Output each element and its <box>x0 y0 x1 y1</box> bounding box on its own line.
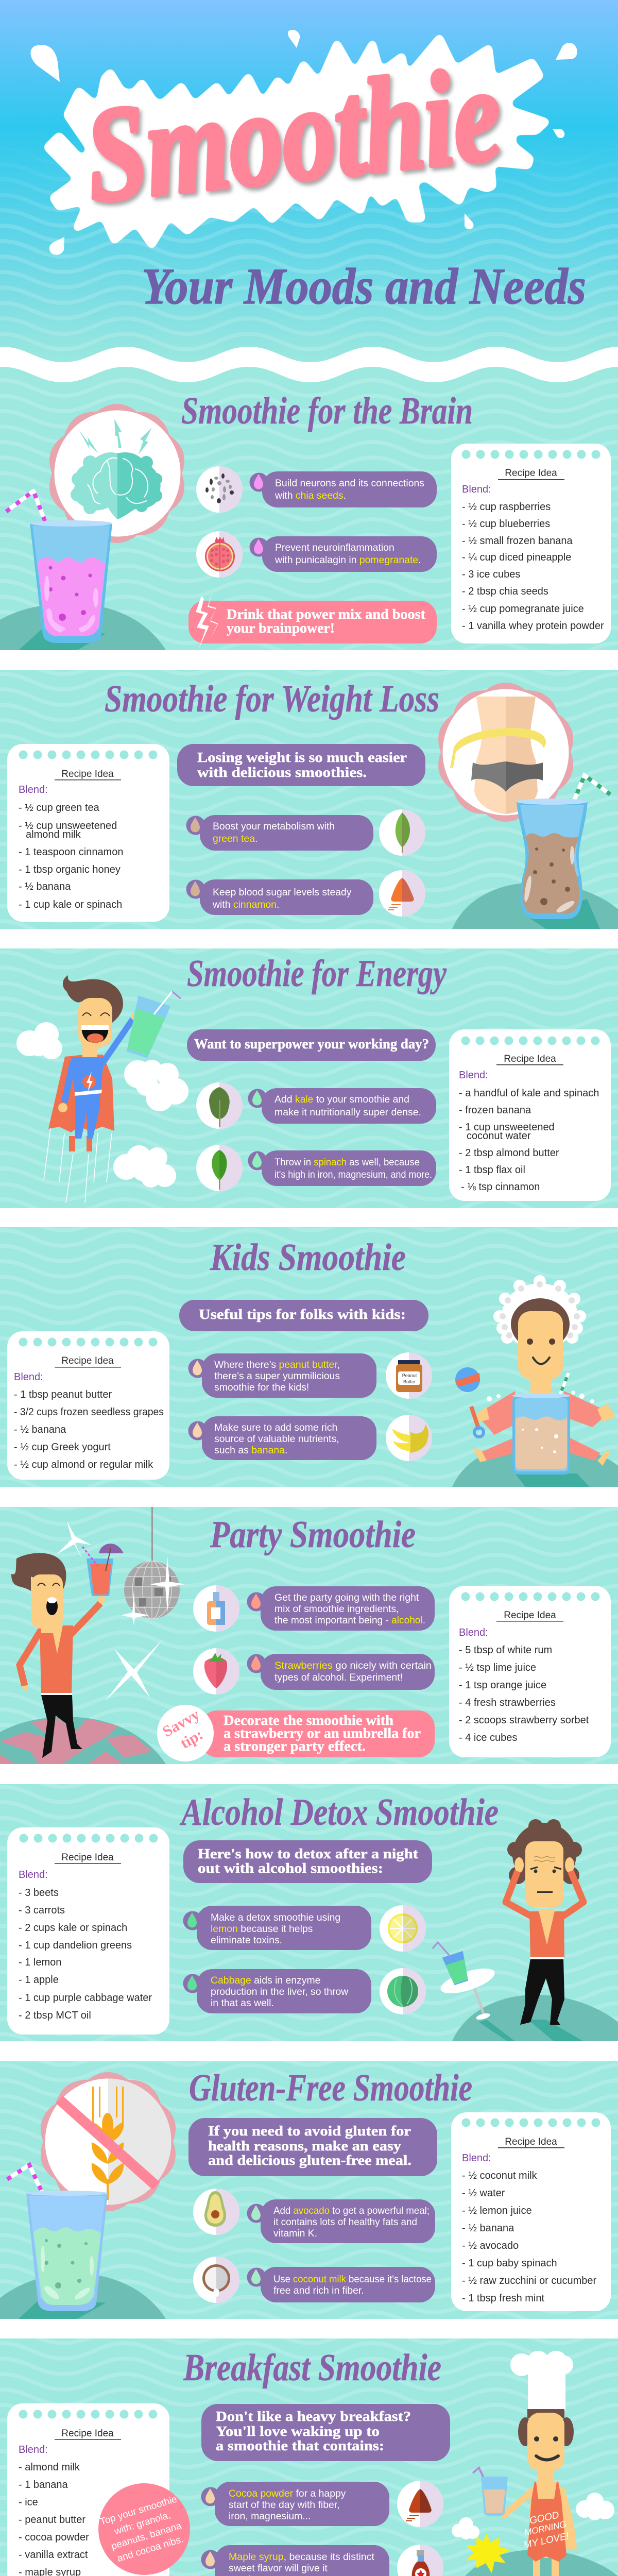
card: recipe idea <box>449 1586 611 1757</box>
card: recipe idea: Blend: <box>459 1070 488 1081</box>
tip: lemon: Make a detox smoothie using <box>211 1912 340 1923</box>
tip: coconut: free and rich in fiber. <box>273 2285 364 2296</box>
icon: hungover man <box>506 1819 583 2025</box>
tip: cocoa: iron, magnesium... <box>229 2511 311 2522</box>
icon: maple syrup <box>397 2545 443 2576</box>
icon: pomegranate <box>196 531 243 578</box>
icon: brown smoothie glass <box>517 775 610 919</box>
callout: drink that power mix: Drink that power mix and boost <box>227 606 425 622</box>
card: recipe idea: - 5 tbsp of white rum <box>459 1645 552 1656</box>
card: recipe idea: Recipe Idea <box>61 769 114 779</box>
icon: disco ball <box>124 1507 180 1619</box>
icon: baby <box>455 1275 615 1466</box>
card: recipe idea: Blend: <box>459 1627 488 1638</box>
card: recipe idea: - ½ lemon juice <box>462 2205 532 2216</box>
card: recipe idea: - vanilla extract <box>19 2549 88 2561</box>
panel: smoothie for weight loss <box>0 670 618 929</box>
card: recipe idea: Blend: <box>19 2444 48 2455</box>
card: recipe idea: Recipe Idea <box>61 1852 114 1863</box>
tip: kale <box>248 1088 436 1124</box>
icon: chef <box>502 2351 574 2576</box>
card: recipe idea: - 1 apple <box>19 1974 59 1986</box>
card: recipe idea: - ½ water <box>462 2188 505 2199</box>
tip: alcohol: mix of smoothie ingredients, <box>274 1603 399 1615</box>
card: recipe idea: Blend: <box>19 1869 48 1880</box>
tip: cabbage: Cabbage aids in enzyme <box>211 1975 320 1986</box>
heading: Gluten-Free Smoothie <box>189 2067 472 2109</box>
tip: peanut butter: there's a super yummilicious <box>214 1370 340 1382</box>
icon: peanut butter jar: Butter <box>403 1379 416 1384</box>
icon: hill <box>452 1995 618 2041</box>
callout: intro <box>187 1029 436 1061</box>
callout: savvy tip: Decorate the smoothie with <box>224 1713 393 1728</box>
card: recipe idea: - ½ coconut milk <box>462 2170 538 2181</box>
panel: alcohol detox smoothie <box>0 1784 618 2041</box>
icon: kale <box>196 1082 243 1129</box>
panel: header <box>0 0 618 366</box>
card: recipe idea: - 1 cup purple cabbage water <box>19 1992 152 2004</box>
callout: intro <box>179 1300 428 1331</box>
tip: cabbage <box>183 1969 371 2013</box>
card: recipe idea: Recipe Idea <box>505 468 557 479</box>
icon: milk splash <box>47 38 546 245</box>
icon: chef: GOOD <box>528 2510 560 2527</box>
icon: brain badge <box>49 404 184 543</box>
card: recipe idea: - 1 teaspoon cinnamon <box>19 846 123 858</box>
icon: lemon <box>380 1905 426 1952</box>
card: recipe idea: - ½ banana <box>14 1424 66 1435</box>
card: recipe idea: - ½ cup almond or regular milk <box>14 1459 153 1470</box>
callout: intro: a smoothie that contains: <box>216 2438 384 2453</box>
icon: sparkles <box>57 1521 185 1701</box>
tip: banana <box>188 1416 376 1460</box>
tip: chia seeds: Build neurons and its connections <box>275 478 424 489</box>
card: recipe idea: - 3 carrots <box>19 1905 65 1916</box>
card: recipe idea: - ½ cup blueberries <box>462 518 550 530</box>
callout: topping tip: with: granola, <box>113 2510 172 2537</box>
tip: strawberry: Strawberries go nicely with certain <box>274 1660 432 1671</box>
tip: cinnamon: Keep blood sugar levels steady <box>213 887 352 898</box>
callout: intro: Losing weight is so much easier <box>197 750 407 765</box>
tip: cabbage: production in the liver, so throw <box>211 1986 349 1997</box>
tip: lemon: eliminate toxins. <box>211 1935 282 1946</box>
panel: smoothie for the brain <box>0 367 618 650</box>
card: recipe idea: - ½ banana <box>19 881 71 892</box>
card: recipe idea: Blend: <box>462 2153 491 2164</box>
tip: cocoa <box>201 2482 389 2526</box>
tip: alcohol <box>247 1586 435 1631</box>
tip: avocado <box>247 2199 435 2243</box>
card: recipe idea: - ½ cup raspberries <box>462 501 551 513</box>
panel: breakfast smoothie <box>0 2338 618 2576</box>
card: recipe idea: - 2 tbsp MCT oil <box>19 2010 91 2021</box>
tip: lemon: lemon because it helps <box>211 1923 313 1935</box>
heading: Alcohol Detox Smoothie <box>180 1791 499 1834</box>
icon: spinach <box>196 1145 243 1191</box>
tip: cocoa: Cocoa powder for a happy <box>229 2488 346 2499</box>
icon: dance floor <box>0 1717 166 1764</box>
callout: savvy tip: a strawberry or an umbrella for <box>224 1725 421 1741</box>
card: recipe idea: - cocoa powder <box>19 2532 89 2543</box>
tip: alcohol: the most important being - alcohol. <box>274 1615 425 1626</box>
callout: intro: health reasons, make an easy <box>208 2138 402 2154</box>
card: recipe idea: - 1 lemon <box>19 1957 61 1968</box>
icon: party man <box>11 1544 124 1758</box>
heading: Breakfast Smoothie <box>183 2347 441 2389</box>
card: recipe idea: coconut water <box>467 1130 531 1142</box>
card: recipe idea: - ⅛ tsp cinnamon <box>461 1181 540 1193</box>
card: recipe idea: - ½ cup unsweetened <box>19 820 117 832</box>
heading: Party Smoothie <box>210 1514 416 1556</box>
callout: savvy tip <box>157 1705 435 1761</box>
icon: kids smoothie glass <box>512 1373 570 1475</box>
tip: pomegranate: Prevent neuroinflammation <box>275 542 394 553</box>
icon: hill <box>0 604 166 650</box>
card: recipe idea: - 1 tbsp flax oil <box>459 1164 525 1176</box>
icon: chef: MORNING <box>524 2519 567 2537</box>
card: recipe idea: - ½ cup green tea <box>19 802 100 814</box>
icon: avocado <box>193 2189 239 2235</box>
callout: intro: You'll love waking up to <box>216 2424 380 2439</box>
callout: savvy tip: tip: <box>178 1726 206 1752</box>
callout: drink that power mix <box>188 592 437 649</box>
callout: intro: Useful tips for folks with kids: <box>199 1307 406 1322</box>
heading: Smoothie for Weight Loss <box>105 678 439 720</box>
tip: coconut <box>247 2267 435 2302</box>
tip: coconut: Use coconut milk because it's lactose <box>273 2274 432 2285</box>
icon: hill <box>0 2273 166 2319</box>
tip: kale: Add kale to your smoothie and <box>274 1094 409 1105</box>
tip: avocado: Add avocado to get a powerful meal; <box>273 2205 430 2216</box>
card: recipe idea: - ½ small frozen banana <box>462 535 573 547</box>
icon: glass on table <box>433 1942 497 2021</box>
card: recipe idea: - 1 vanilla whey protein powder <box>462 620 604 632</box>
card: recipe idea: - ½ banana <box>462 2223 514 2234</box>
icon: clouds <box>16 1022 188 1188</box>
icon: hill <box>452 1443 618 1487</box>
card: recipe idea <box>7 1331 169 1480</box>
card: recipe idea: - ½ raw zucchini or cucumber <box>462 2275 597 2286</box>
card: recipe idea: - frozen banana <box>459 1105 531 1116</box>
icon: green smoothie glass <box>7 2165 108 2311</box>
subtitle: Your Moods and Needs <box>142 258 586 315</box>
icon: pink smoothie glass <box>6 491 112 643</box>
callout: intro: and delicious gluten-free meal. <box>208 2153 411 2168</box>
tip: strawberry <box>247 1654 435 1690</box>
tip: green tea: Boost your metabolism with <box>213 821 335 832</box>
card: recipe idea: - 4 ice cubes <box>459 1732 517 1743</box>
callout: intro <box>177 744 425 786</box>
card: recipe idea: - 1 banana <box>19 2479 68 2490</box>
tip: avocado: vitamin K. <box>273 2228 317 2239</box>
icon: hill <box>452 2550 618 2576</box>
card: recipe idea: - 1 cup kale or spinach <box>19 899 122 910</box>
panel: party smoothie <box>0 1507 618 1764</box>
card: recipe idea <box>7 2403 169 2576</box>
callout: intro: Want to superpower your working day? <box>194 1036 429 1052</box>
card: recipe idea <box>7 744 169 922</box>
heading: Smoothie for the Brain <box>181 390 473 432</box>
callout: drink that power mix: your brainpower! <box>227 620 335 636</box>
card: recipe idea <box>449 1029 611 1201</box>
tip: peanut butter: smoothie for the kids! <box>214 1382 309 1393</box>
tip: banana: Make sure to add some rich <box>214 1422 337 1433</box>
card: recipe idea: - 3 ice cubes <box>462 569 520 580</box>
panel: gluten-free smoothie <box>0 2061 618 2319</box>
wave divider <box>0 347 618 392</box>
card: recipe idea: - 1 cup dandelion greens <box>19 1940 132 1951</box>
callout: topping tip <box>98 2483 190 2575</box>
tip: spinach: it's high in iron, magnesium, and more. <box>274 1169 432 1180</box>
card: recipe idea: - 3/2 cups frozen seedless grapes <box>14 1406 164 1418</box>
card: recipe idea: - ice <box>19 2497 38 2508</box>
tip: strawberry: types of alcohol. Experiment! <box>274 1672 403 1683</box>
heading: Kids Smoothie <box>210 1236 406 1279</box>
icon: chia seeds <box>196 466 243 513</box>
icon: chef: MY LOVE! <box>523 2531 570 2551</box>
tip: kale: make it nutritionally super dense. <box>274 1107 421 1118</box>
icon: no gluten badge <box>41 2072 176 2211</box>
card: recipe idea: Recipe Idea <box>505 2137 557 2147</box>
card: recipe idea: - 1 tbsp peanut butter <box>14 1389 112 1400</box>
callout: topping tip: and cocoa nibs. <box>116 2534 185 2564</box>
card: recipe idea: - a handful of kale and spinach <box>459 1088 599 1099</box>
icon: coconut <box>193 2257 239 2303</box>
title: Smoothie <box>79 39 508 230</box>
icon: superhero <box>44 975 182 1203</box>
callout: savvy tip: a stronger party effect. <box>224 1738 366 1754</box>
card: recipe idea: Recipe Idea <box>61 2428 114 2439</box>
tip: pomegranate <box>249 536 437 572</box>
tip: lemon <box>183 1906 371 1950</box>
tip: cinnamon: with cinnamon. <box>212 899 279 910</box>
callout: intro <box>183 1840 432 1883</box>
icon: peanut butter jar: Peanut <box>402 1373 417 1378</box>
icon: cocoa powder <box>397 2481 443 2527</box>
tip: spinach: Throw in spinach as well, because <box>274 1157 420 1168</box>
card: recipe idea: - 1 tsp orange juice <box>459 1680 546 1691</box>
tip: chia seeds <box>249 471 437 507</box>
tip: banana: source of valuable nutrients, <box>214 1433 339 1445</box>
callout: topping tip: Top your smoothie <box>99 2494 178 2528</box>
card: recipe idea <box>451 444 611 643</box>
card: recipe idea: - 1 cup baby spinach <box>462 2258 557 2269</box>
card: recipe idea: - 1 cup unsweetened <box>459 1122 555 1133</box>
callout: topping tip: peanuts, banana <box>110 2520 183 2552</box>
card: recipe idea: Recipe Idea <box>61 1355 114 1366</box>
card: recipe idea: - 1 tbsp organic honey <box>19 864 121 875</box>
tip: cabbage: in that as well. <box>211 1997 274 2009</box>
icon: alcohol bottle <box>193 1585 239 1632</box>
icon: waist badge <box>438 683 573 822</box>
tip: pomegranate: with punicalagin in pomegranate. <box>274 554 421 566</box>
card: recipe idea: - ¼ cup diced pineapple <box>462 552 571 563</box>
tip: maple syrup: Maple syrup, because its distinct <box>229 2551 375 2563</box>
tip: spinach <box>248 1150 436 1186</box>
tip: alcohol: Get the party going with the right <box>274 1592 419 1603</box>
card: recipe idea <box>7 1827 169 2035</box>
tip: banana: such as banana. <box>214 1445 287 1456</box>
icon: banana <box>386 1415 432 1461</box>
tip: avocado: it contains lots of healthy fats and <box>273 2216 417 2228</box>
card: recipe idea: - 4 fresh strawberries <box>459 1697 556 1708</box>
card: recipe idea: Blend: <box>462 484 491 495</box>
tip: peanut butter: Where there's peanut butter, <box>214 1359 340 1370</box>
callout: intro: If you need to avoid gluten for <box>208 2123 411 2139</box>
card: recipe idea <box>451 2112 611 2311</box>
tip: peanut butter <box>188 1353 376 1398</box>
callout: intro <box>201 2404 450 2461</box>
card: recipe idea: - 1 tbsp fresh mint <box>462 2293 545 2304</box>
card: recipe idea: - 2 tbsp chia seeds <box>462 586 548 597</box>
icon: strawberry <box>193 1648 239 1694</box>
callout: intro: with delicious smoothies. <box>197 765 367 780</box>
card: recipe idea: - almond milk <box>19 2462 80 2473</box>
callout: intro: out with alcohol smoothies: <box>198 1860 383 1876</box>
card: recipe idea: - ½ cup Greek yogurt <box>14 1442 111 1453</box>
callout: savvy tip: Savvy <box>160 1706 202 1740</box>
card: recipe idea: - 3 beets <box>19 1887 59 1899</box>
callout: intro: Here's how to detox after a night <box>198 1846 418 1861</box>
icon: cabbage <box>380 1968 426 2014</box>
card: recipe idea: Recipe Idea <box>504 1610 556 1621</box>
icon: cinnamon <box>379 870 425 917</box>
tip: green tea <box>186 815 373 851</box>
tip: cinnamon <box>186 879 373 915</box>
card: recipe idea: Blend: <box>19 784 48 795</box>
card: recipe idea: - 2 cups kale or spinach <box>19 1922 127 1934</box>
tip: cocoa: start of the day with fiber, <box>229 2499 340 2511</box>
card: recipe idea: Recipe Idea <box>504 1054 556 1064</box>
icon: peanut butter jar <box>386 1352 432 1399</box>
card: recipe idea: - peanut butter <box>19 2514 85 2526</box>
callout: intro <box>188 2118 437 2176</box>
tip: maple syrup <box>201 2545 389 2576</box>
icon: breakfast glass <box>473 2468 508 2516</box>
card: recipe idea: - ½ cup pomegranate juice <box>462 603 584 615</box>
icon: splash droplets <box>30 30 577 255</box>
icon: green tea leaf <box>379 809 425 856</box>
card: recipe idea: almond milk <box>26 829 81 840</box>
card: recipe idea: - ½ avocado <box>462 2240 519 2251</box>
icon: clouds and sun <box>452 2493 614 2573</box>
panel: smoothie for energy <box>0 948 618 1208</box>
card: recipe idea: Blend: <box>14 1371 43 1383</box>
callout: intro: Don't like a heavy breakfast? <box>216 2409 411 2424</box>
card: recipe idea: - 2 tbsp almond butter <box>459 1147 559 1159</box>
tip: chia seeds: with chia seeds. <box>274 490 346 501</box>
card: recipe idea: - 2 scoops strawberry sorbet <box>459 1715 589 1726</box>
panel: kids smoothie <box>0 1227 618 1487</box>
card: recipe idea: - ½ tsp lime juice <box>459 1662 536 1673</box>
tip: green tea: green tea. <box>213 833 258 844</box>
tip: maple syrup: sweet flavor will give it <box>229 2563 328 2574</box>
heading: Smoothie for Energy <box>187 953 447 995</box>
icon: hill <box>452 883 618 929</box>
